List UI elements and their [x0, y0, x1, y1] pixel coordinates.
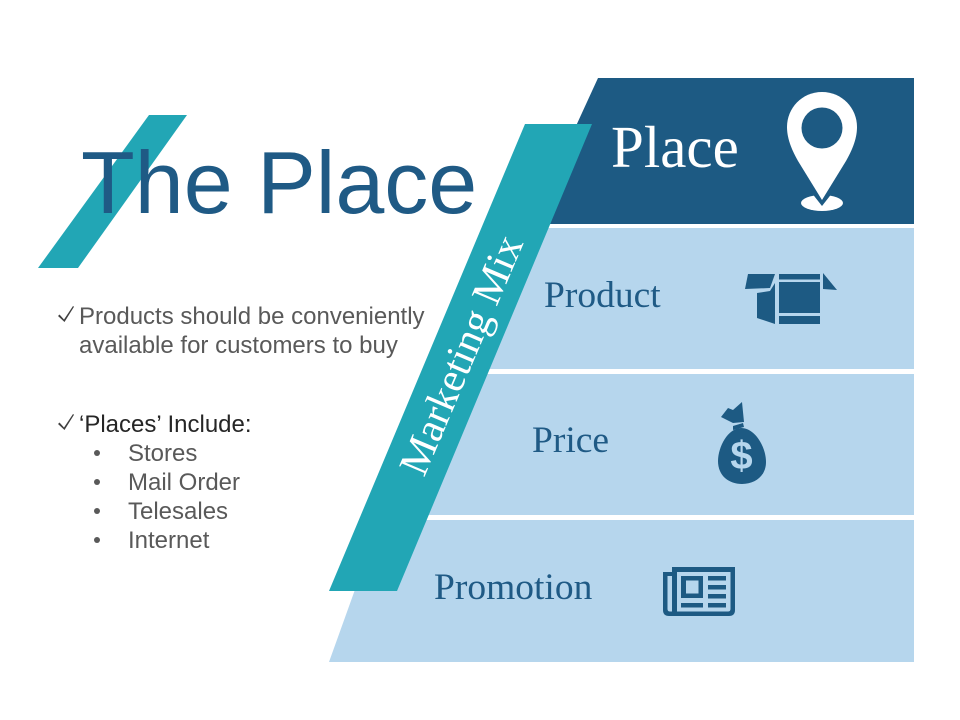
icon: newspaper — [663, 567, 735, 616]
panel: promotion: Promotion — [434, 567, 593, 608]
icon: money bag: $ — [730, 434, 753, 478]
panel: price: Price — [532, 420, 609, 461]
panel: product: Product — [544, 275, 661, 316]
banner: marketing mix: Marketing Mix — [391, 229, 533, 482]
title: The Place — [81, 133, 477, 232]
panel: place — [531, 78, 914, 224]
text block: places list: Stores — [128, 440, 197, 467]
text block: places list: Mail Order — [128, 469, 240, 496]
panel: promotion — [329, 520, 914, 662]
text block: places list: Internet — [128, 527, 210, 554]
banner: marketing mix — [329, 124, 592, 591]
icon: open box — [745, 273, 837, 324]
decorative teal slash behind title — [38, 115, 187, 268]
text block: places list — [58, 411, 252, 554]
text block: places list: ‘Places’ Include: — [79, 411, 252, 438]
icon: location pin — [787, 92, 857, 211]
panel: price — [382, 374, 914, 515]
text block: convenience point — [58, 303, 425, 359]
text block: places list: Telesales — [128, 498, 228, 525]
panel: place: Place — [611, 114, 739, 180]
text block: convenience point: available for customers to buy — [79, 332, 398, 359]
text block: convenience point: Products should be conveniently — [79, 303, 425, 330]
icon: money bag — [718, 402, 766, 484]
panel: product — [449, 228, 914, 369]
